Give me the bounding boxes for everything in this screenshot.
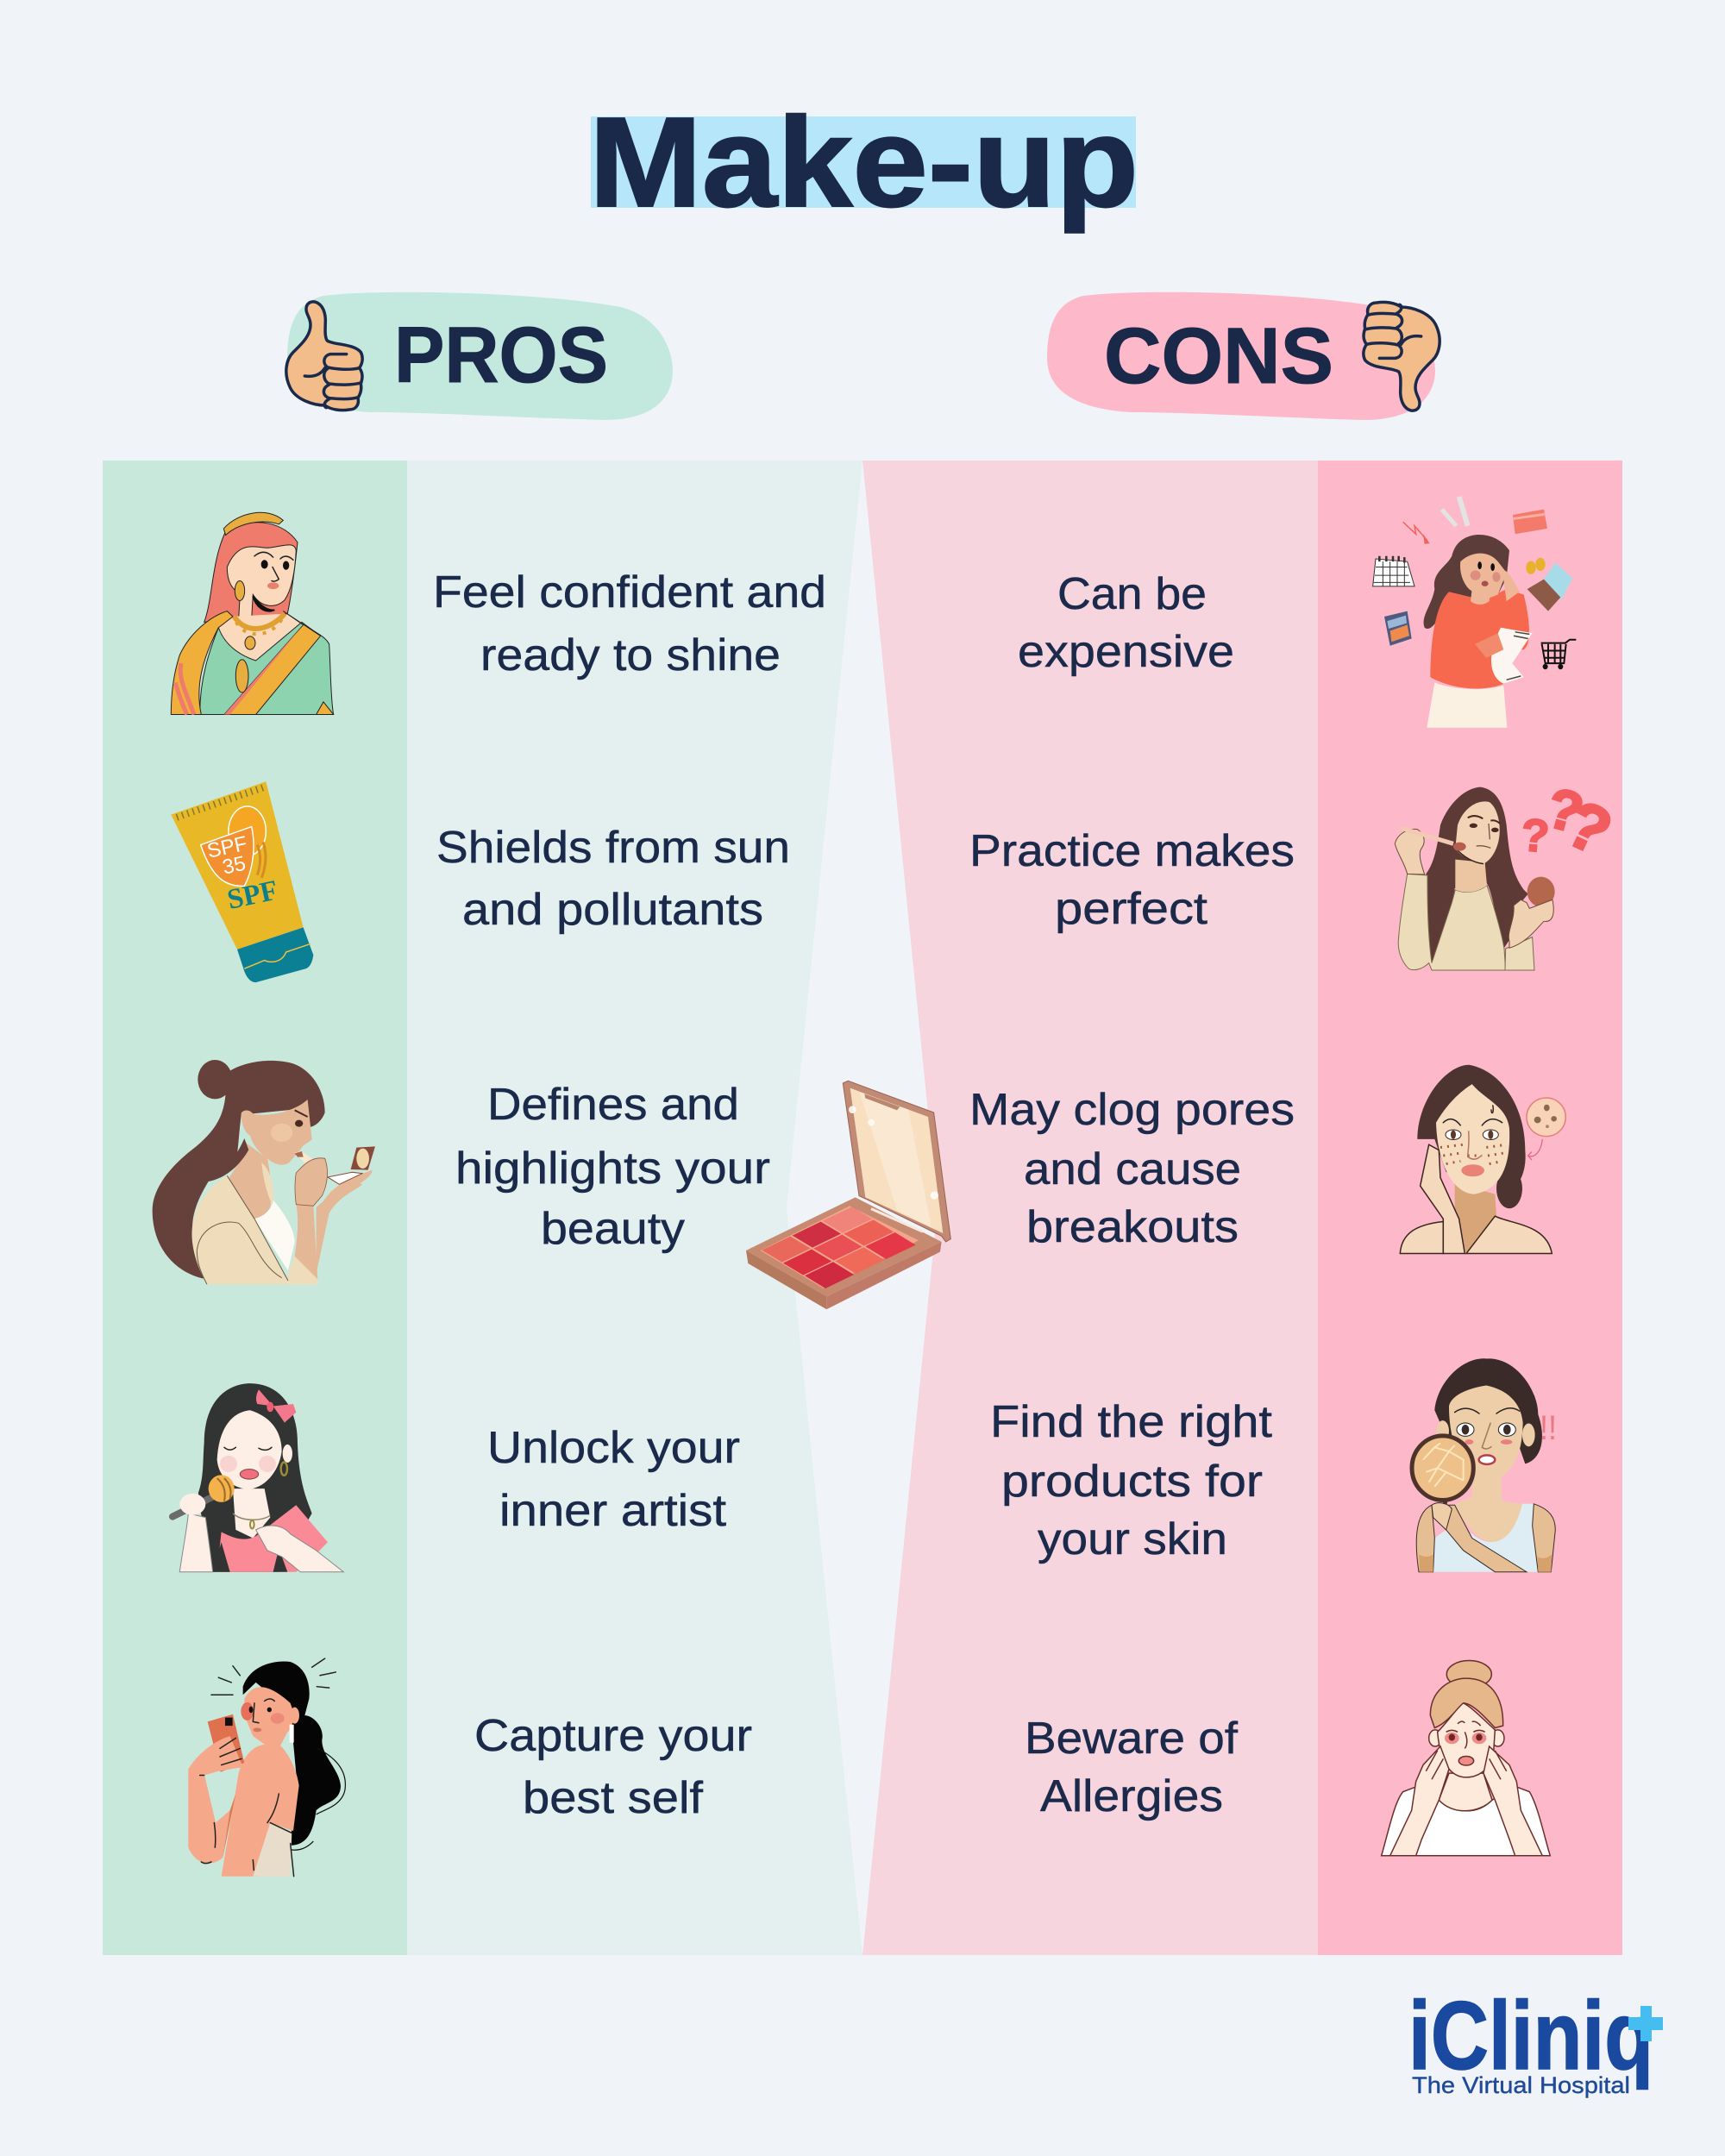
- text: cons list: and cause: [1024, 1144, 1241, 1194]
- text: cons list: Can be: [1057, 569, 1207, 619]
- illustration: woman unsure applying makeup: ?: [1555, 787, 1622, 870]
- illustration: makeup palette: [746, 1081, 950, 1309]
- illustration: woman unsure applying makeup: ?: [1519, 810, 1551, 862]
- panel: cons column: [862, 461, 1622, 1955]
- illustration: sunscreen tube: SPF: [205, 832, 249, 863]
- text: pros list: ready to shine: [480, 630, 781, 680]
- illustration: woman with magnifying mirror: !!: [1540, 1409, 1557, 1447]
- logo: iCliniq: iCliniq: [1408, 1982, 1653, 2090]
- illustration: woman with clogged pores and freckles: [1400, 1065, 1565, 1254]
- illustration: woman unsure applying makeup: ?: [1540, 775, 1590, 845]
- heading: cons badge: CONS: [1104, 312, 1333, 400]
- illustration: woman applying lipstick: [153, 1060, 375, 1284]
- illustration: worried woman with receipt and expenses: [1373, 497, 1576, 728]
- illustration: woman taking selfie: [188, 1658, 345, 1877]
- text: pros list: beauty: [541, 1204, 685, 1254]
- heading: pros badge: [286, 292, 673, 420]
- text: pros list: highlights your: [455, 1144, 770, 1194]
- text: pros list: inner artist: [499, 1486, 727, 1536]
- text: cons list: [969, 569, 1295, 1821]
- panel: pros column: [103, 461, 862, 1955]
- text: cons list: Practice makes: [969, 826, 1295, 876]
- text: cons list: perfect: [1055, 884, 1208, 934]
- text: pros list: Defines and: [487, 1080, 739, 1130]
- text: pros list: Shields from sun: [436, 823, 790, 873]
- illustration: woman with blush brush: [172, 1383, 343, 1572]
- text: pros list: Feel confident and: [433, 567, 826, 617]
- text: cons list: expensive: [1018, 627, 1234, 677]
- title: Make-up: Make-up: [589, 91, 1138, 234]
- logo: iCliniq: The Virtual Hospital: [1412, 2072, 1630, 2098]
- text: cons list: your skin: [1038, 1514, 1227, 1564]
- heading: cons badge: [1047, 292, 1440, 420]
- illustration: sunscreen tube: [171, 781, 313, 982]
- heading: pros badge: PROS: [394, 311, 608, 399]
- text: pros list: and pollutants: [462, 885, 763, 935]
- icon: plus: [1628, 2006, 1663, 2041]
- text: cons list: products for: [1001, 1457, 1263, 1507]
- illustration: sunscreen tube: 35: [221, 852, 248, 880]
- illustration: woman with allergy reaction: [1382, 1661, 1550, 1856]
- text: cons list: Allergies: [1040, 1771, 1223, 1821]
- text: cons list: breakouts: [1026, 1202, 1239, 1252]
- text: pros list: [433, 567, 826, 1823]
- illustration: woman with magnifying mirror: [1412, 1358, 1557, 1572]
- text: cons list: Find the right: [990, 1397, 1273, 1447]
- icon: thumbs down: [1364, 302, 1440, 411]
- text: pros list: best self: [523, 1773, 704, 1823]
- text: cons list: May clog pores: [969, 1085, 1295, 1135]
- icon: thumbs up: [286, 302, 362, 411]
- illustration: woman unsure applying makeup: [1395, 775, 1622, 970]
- illustration: queen with necklace: [171, 512, 334, 714]
- text: pros list: Capture your: [474, 1711, 752, 1761]
- text: cons list: Beware of: [1025, 1714, 1239, 1764]
- illustration: sunscreen tube: SPF: [224, 875, 280, 916]
- text: pros list: Unlock your: [487, 1423, 740, 1473]
